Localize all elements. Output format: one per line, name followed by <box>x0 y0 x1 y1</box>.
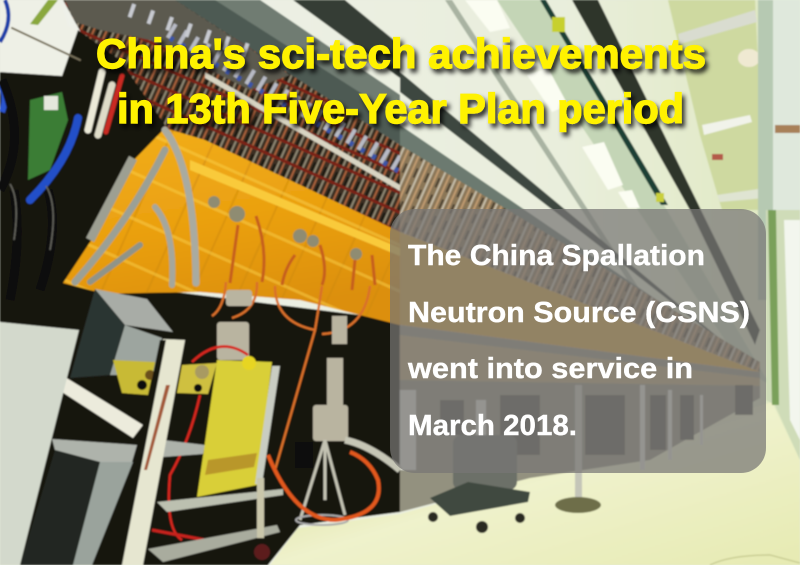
body text <box>407 240 750 442</box>
silver duct <box>345 440 400 470</box>
floor <box>270 402 800 565</box>
cart shelves <box>157 489 283 512</box>
body text: The China Spallation <box>408 240 705 272</box>
body text: Neutron Source (CSNS) <box>408 297 750 329</box>
red-orange cable loops <box>212 282 370 470</box>
yellow magnet body <box>63 128 400 325</box>
right wall columns <box>758 0 774 300</box>
dark lower backdrop <box>0 270 400 565</box>
orange hose <box>268 452 379 520</box>
vacuum pump on cart <box>453 435 517 490</box>
body text: March 2018. <box>408 410 577 442</box>
machinery behind panel <box>400 325 760 512</box>
black cables <box>0 80 52 300</box>
title: in 13th Five-Year Plan period <box>117 85 684 132</box>
brass block <box>113 360 155 395</box>
top-left white wall <box>0 0 78 78</box>
silver hoses <box>75 130 196 285</box>
metal strut <box>118 339 185 565</box>
magnet continuing behind panel <box>400 232 760 372</box>
red cable <box>169 346 248 540</box>
white tube <box>205 72 400 191</box>
warning disc <box>242 356 256 370</box>
thin rail <box>445 0 640 290</box>
white sensor bar <box>62 377 143 438</box>
insulator rows <box>130 10 400 172</box>
silver ring <box>90 158 133 240</box>
title <box>96 30 706 132</box>
stand base <box>575 385 582 505</box>
title: China's sci-tech achievements <box>96 30 706 77</box>
white rods <box>12 28 122 135</box>
ceiling lights <box>465 0 640 208</box>
pumps <box>217 290 348 441</box>
equipment rack with wires <box>63 0 400 232</box>
cabinet shelf <box>52 439 137 462</box>
grey steel cabinet <box>70 289 125 378</box>
green tag <box>30 0 58 25</box>
green circuit boards <box>28 92 68 180</box>
yellow plate <box>197 360 272 497</box>
grey cabinet front <box>20 450 132 565</box>
distant floor cable <box>710 555 800 565</box>
body text: went into service in <box>407 353 693 385</box>
blue hose <box>30 118 78 200</box>
rack continuing behind panel <box>400 145 760 372</box>
dark rail <box>293 0 400 78</box>
panel: translucent grey callout box <box>390 209 766 473</box>
grey beam <box>173 0 400 145</box>
cable tray <box>668 0 765 210</box>
black beam <box>572 0 760 345</box>
white panel <box>0 322 79 565</box>
control box <box>295 442 313 468</box>
magnet ports and orange cables <box>230 216 375 290</box>
green-edge rail <box>540 0 668 205</box>
tripod <box>300 440 345 520</box>
ceiling panel: green strip <box>497 0 770 385</box>
yellow clips <box>552 17 565 32</box>
dark left machinery <box>0 30 165 322</box>
